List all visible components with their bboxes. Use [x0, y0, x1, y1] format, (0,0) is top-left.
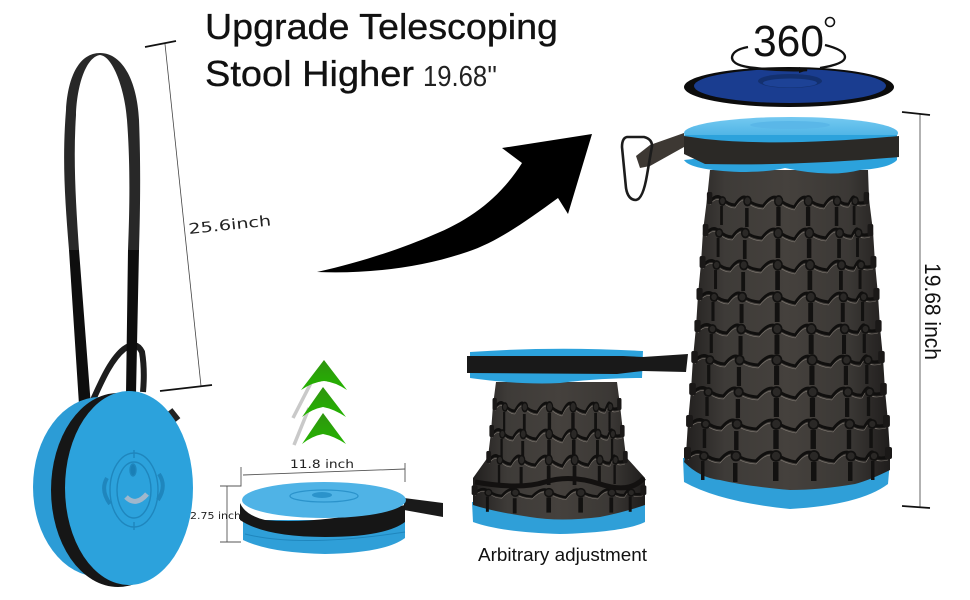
icon: three green up chevrons — [293, 360, 347, 445]
dimension: 25.6inch: 25.6inch — [188, 213, 272, 238]
title: Upgrade Telescoping Stool Higher: 19.68'' — [423, 61, 497, 93]
carabiner strap — [636, 133, 684, 168]
icon: large black curved arrow — [317, 134, 592, 272]
strap band — [684, 136, 899, 164]
top disc — [242, 482, 406, 518]
base ring — [683, 458, 890, 509]
dimension: 11.8 inch — [220, 457, 405, 486]
swivel cushion — [684, 67, 894, 107]
360 degree rotation mark — [732, 17, 845, 73]
centre hub — [104, 450, 163, 530]
black band — [51, 393, 185, 587]
folded round stool with carrying strap — [33, 53, 193, 587]
caption: Arbitrary adjustment: Arbitrary adjustment — [478, 545, 647, 565]
dimension: 2.75 inch: 2.75 inch — [190, 511, 241, 522]
dimension: 19.68 inch — [902, 112, 945, 508]
shoulder strap lower section — [69, 250, 139, 420]
top disc — [684, 117, 898, 149]
ridges — [493, 398, 621, 433]
strap — [467, 354, 688, 374]
dimension: 19.68 inch: 19.68 inch — [920, 263, 945, 360]
360 degree rotation mark: 360 — [753, 17, 824, 66]
dimension: 25.6inch — [145, 41, 272, 391]
disc front face — [65, 391, 193, 585]
title: Upgrade Telescoping Stool Higher: Upgrade Telescoping — [205, 6, 558, 47]
dimension: 11.8 inch: 11.8 inch — [290, 457, 354, 471]
title: Upgrade Telescoping Stool Higher: Stool Higher — [205, 53, 414, 94]
black band — [240, 503, 405, 537]
fully extended stool — [622, 117, 899, 509]
lower shell — [243, 520, 405, 554]
top disc — [470, 349, 643, 383]
base ring — [472, 502, 645, 534]
ridges — [707, 192, 869, 227]
collapsed flat stool — [240, 482, 443, 554]
dimension: 2.75 inch — [190, 486, 241, 542]
title: Upgrade Telescoping Stool Higher — [205, 6, 558, 94]
carabiner — [622, 137, 652, 200]
side strap — [404, 498, 443, 517]
shoulder strap upper section — [64, 53, 140, 250]
handle strap — [92, 345, 144, 402]
body — [684, 170, 890, 490]
half extended stool — [467, 349, 688, 534]
disc rear shell — [33, 397, 167, 577]
body — [473, 382, 645, 520]
rear clip strap — [170, 410, 178, 420]
